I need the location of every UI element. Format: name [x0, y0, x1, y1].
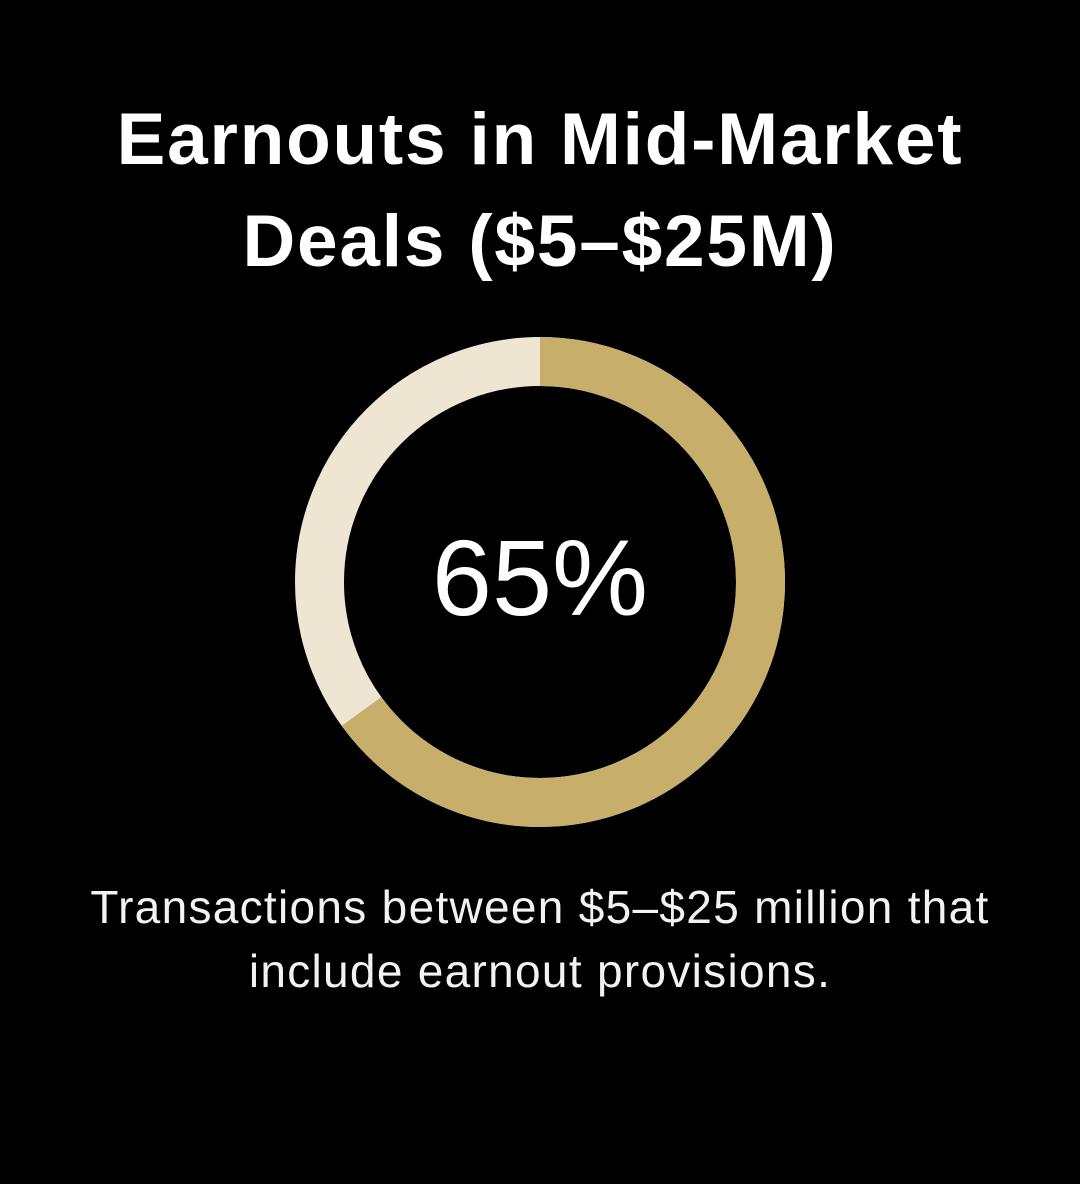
title	[117, 99, 963, 282]
description text	[90, 881, 990, 997]
donut remainder segment	[320, 362, 760, 802]
title: Deals ($5–$25M)	[242, 201, 838, 282]
title: Earnouts in Mid-Market	[117, 99, 963, 180]
description text: include earnout provisions.	[249, 945, 831, 997]
description text: Transactions between $5–$25 million that	[90, 881, 990, 933]
percentage label: 65%	[432, 517, 648, 638]
donut 65% segment	[320, 362, 760, 802]
donut chart	[295, 337, 785, 827]
